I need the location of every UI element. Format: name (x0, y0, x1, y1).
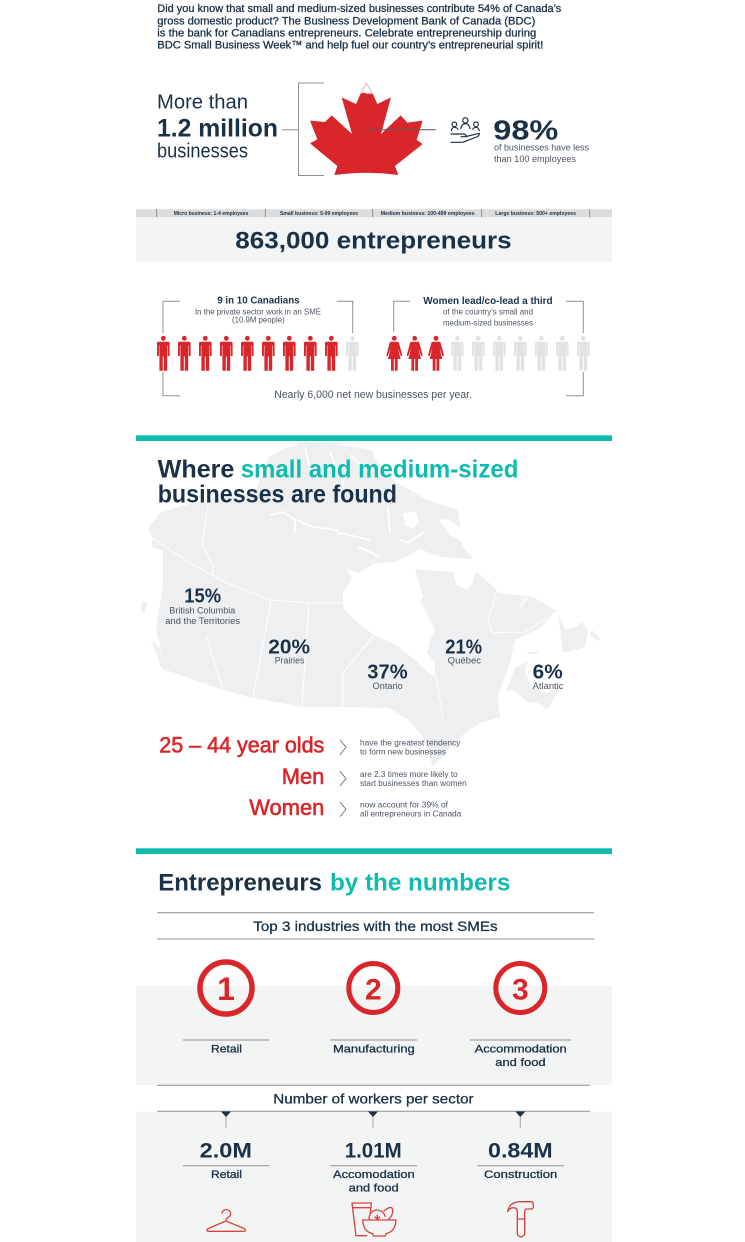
rank 1: retail: 1 (217, 971, 235, 1007)
map stat: British Columbia: 15% (184, 585, 221, 607)
intro paragraph: gross domestic product? The Business Development Bank of Canada (BDC) (157, 15, 535, 27)
stat: 98% of businesses (493, 114, 589, 165)
stat: accommodation workers (330, 1139, 417, 1194)
business size band: Micro business: 1-4 employees (174, 211, 248, 217)
panel: workers background (136, 1112, 612, 1242)
fact: men: are 2.3 times more likely to (360, 770, 458, 779)
fact: 25-44 year olds: to form new businesses (360, 748, 446, 757)
rank 3: accommodation and food (470, 964, 571, 1069)
pictogram: 3 in 10 women (386, 336, 590, 371)
stat: 98% of businesses: of businesses have less (494, 142, 589, 153)
rank 3: accommodation and food: and food (495, 1057, 546, 1069)
icon: maple leaf (310, 83, 423, 175)
fact: 25-44 year olds: have the greatest tendency (360, 739, 460, 748)
pointers (221, 1112, 525, 1128)
icon: hammer (508, 1202, 533, 1237)
icon: clothes hanger (207, 1210, 246, 1231)
callout: women lead: medium-sized businesses (443, 317, 533, 327)
pictogram: 9 in 10 men (157, 336, 359, 371)
rank 1: retail: Retail (211, 1044, 242, 1056)
stat: 1.2 million businesses: More than (157, 92, 248, 114)
section divider (136, 435, 612, 441)
callout: women lead: of the country’s small and (443, 307, 533, 317)
subheading: top 3 industries: Top 3 industries with the most SMEs (253, 918, 498, 934)
stat: retail workers (183, 1139, 269, 1181)
stat: construction workers: Construction (484, 1169, 557, 1181)
intro paragraph: Did you know that small and medium-sized businesses contribute 54% of Canada’s (157, 3, 562, 15)
heading: where businesses are found: Where (158, 456, 234, 484)
text: net new businesses: Nearly 6,000 net new businesses per year. (274, 389, 472, 401)
map stat: Ontario: Ontario (373, 681, 403, 691)
map stat: Atlantic: 6% (533, 662, 563, 684)
connector line to 98% stat (367, 129, 436, 131)
map stat: British Columbia (165, 585, 241, 626)
heading: entrepreneurs by the numbers: Entrepreneurs (158, 870, 322, 897)
Hudson Bay and straits (343, 549, 477, 676)
business size band: Medium business: 100-499 employees (381, 211, 475, 217)
stat: 1.2 million businesses: 1.2 million (157, 115, 278, 143)
map stat: Prairies: 20% (268, 636, 310, 658)
callout: 9 in 10 Canadians: In the private sector work in an SME (195, 307, 321, 317)
panel: 863,000 entrepreneurs (136, 217, 612, 262)
fact: 25-44 year olds: 25 – 44 year olds (159, 733, 324, 758)
bracket around maple leaf (282, 83, 324, 176)
heading: where businesses are found: businesses are found (158, 481, 397, 509)
callout: 9 in 10 Canadians (195, 296, 321, 325)
fact: women (249, 795, 462, 820)
fact: women: now account for 39% of (360, 800, 449, 809)
subheading: number of workers: Number of workers per sector (273, 1091, 474, 1106)
stat: retail workers: Retail (211, 1169, 242, 1181)
map stat: Atlantic: Atlantic (533, 681, 564, 691)
fact: men: start businesses than women (360, 779, 467, 788)
panel: industries background (136, 986, 612, 1085)
stat: construction workers (477, 1139, 564, 1181)
business size band (136, 209, 612, 217)
map stat: British Columbia: and the Territories (165, 616, 241, 626)
intro paragraph: BDC Small Business Week™ and help fuel our country’s entrepreneurial spirit! (157, 40, 543, 52)
section divider (136, 848, 612, 854)
callout: women lead: Women lead/co-lead a third (423, 296, 553, 307)
stat: accommodation workers: Accomodation (333, 1169, 415, 1181)
business size band: Small business: 5-99 employees (280, 211, 358, 217)
stat: accommodation workers: 1.01M (345, 1139, 402, 1162)
subheading: top 3 industries (157, 913, 594, 939)
map of Canada (141, 442, 600, 767)
heading: entrepreneurs by the numbers: by the numbers (330, 870, 510, 897)
callout: 9 in 10 Canadians: 9 in 10 Canadians (217, 296, 300, 307)
business size band: Large business: 500+ employees (495, 211, 576, 217)
map stat: Prairies: Prairies (275, 656, 305, 666)
fact: women: Women (249, 795, 324, 820)
callout: women lead (423, 296, 553, 327)
icon: hand holding people (451, 118, 479, 142)
map stat: Ontario: 37% (367, 662, 408, 684)
callout: 9 in 10 Canadians: (10.9M people) (232, 315, 285, 325)
map stat: British Columbia: British Columbia (169, 605, 235, 615)
stat: 98% of businesses: than 100 employees (494, 154, 576, 165)
fact: men: Men (282, 764, 324, 789)
map borders and channels (152, 447, 555, 717)
stat: 98% of businesses: 98% (493, 114, 558, 145)
map stat: Quebec: 21% (445, 636, 482, 658)
stat: 1.2 million businesses: businesses (157, 141, 248, 163)
subheading: number of workers (157, 1085, 590, 1111)
fact: 25-44 year olds (159, 733, 460, 758)
rank 2: manufacturing: 2 (365, 974, 382, 1006)
stat: 1.2 million businesses (157, 92, 278, 163)
rank 1: retail (183, 962, 269, 1056)
fact: women: all entrepreneurs in Canada (360, 810, 462, 819)
map stat: Quebec: Québec (448, 656, 482, 666)
fact: men (282, 764, 467, 789)
panel: 863,000 entrepreneurs: 863,000 entrepreneurs (235, 227, 512, 254)
stat: retail workers: 2.0M (200, 1139, 252, 1162)
rank 3: accommodation and food: 3 (512, 974, 529, 1006)
brackets around people (163, 301, 583, 396)
stat: accommodation workers: and food (349, 1182, 399, 1194)
icon: food and drink (352, 1203, 396, 1236)
rank 2: manufacturing: Manufacturing (333, 1044, 415, 1056)
heading: entrepreneurs by the numbers (158, 870, 510, 897)
rank 2: manufacturing (330, 964, 417, 1056)
rank 3: accommodation and food: Accommodation (475, 1044, 567, 1056)
Foxe Basin and Baffin inlet (403, 512, 463, 543)
stat: construction workers: 0.84M (488, 1139, 553, 1162)
intro paragraph: is the bank for Canadians entrepreneurs. Celebrate entrepreneurship during (157, 28, 536, 40)
heading: where businesses are found: small and medium-sized (241, 456, 518, 484)
intro paragraph (157, 3, 562, 52)
heading: where businesses are found (158, 456, 518, 509)
map stat: Atlantic (533, 662, 564, 691)
